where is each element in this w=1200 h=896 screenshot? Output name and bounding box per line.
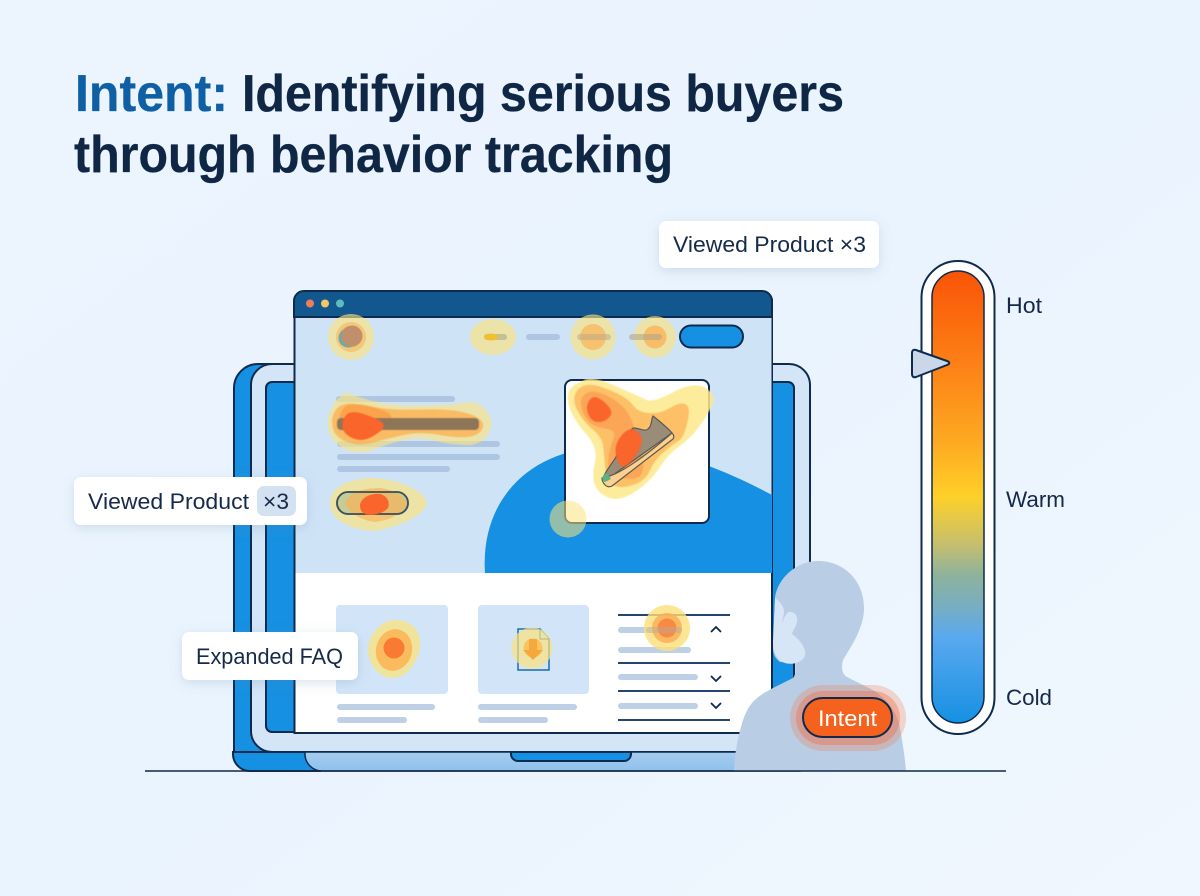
intent badge (790, 685, 906, 751)
intent badge: Intent (818, 706, 877, 731)
nav button (680, 326, 743, 348)
callout: expanded FAQ: Expanded FAQ (196, 644, 343, 669)
title: Intent: (75, 65, 228, 123)
card 2 (478, 605, 589, 694)
callout: viewed product left (74, 477, 307, 525)
thermometer labels: Hot (1006, 293, 1043, 318)
laptop screen frame (251, 364, 810, 752)
title: through behavior tracking (74, 126, 673, 184)
callout: viewed product left: ×3 (263, 489, 289, 514)
laptop base (305, 752, 800, 771)
product card (565, 380, 709, 523)
thermometer labels: Warm (1006, 487, 1065, 512)
laptop (233, 364, 810, 771)
laptop notch (511, 752, 631, 761)
laptop inner screen (266, 382, 794, 732)
nav links (484, 334, 560, 340)
heat: document (512, 628, 552, 668)
thermometer pointer (912, 350, 949, 377)
thermometer labels: Cold (1006, 685, 1052, 710)
hero text lines (336, 396, 500, 472)
heat: card 1 (368, 620, 420, 678)
icon: sneaker (602, 416, 674, 487)
heat: nav logo (328, 314, 374, 360)
heat: FAQ (644, 605, 690, 651)
FAQ accordion (618, 615, 730, 720)
person face highlight (773, 598, 805, 664)
callout: viewed product top: Viewed Product ×3 (673, 232, 866, 257)
thermometer labels (1006, 293, 1065, 710)
page background (294, 300, 772, 733)
laptop back shell (234, 364, 300, 752)
icon: download document (518, 629, 549, 670)
heat: product card (569, 380, 712, 497)
callout: expanded FAQ (182, 632, 358, 680)
hero blue shape (485, 447, 772, 573)
callout: viewed product left: Viewed Product (88, 489, 250, 514)
hero cta (337, 492, 408, 514)
laptop base left (233, 752, 320, 771)
window dots (306, 300, 344, 308)
title (74, 65, 844, 184)
ground line (145, 770, 1006, 772)
thermometer (912, 261, 1065, 734)
browser header (294, 291, 772, 317)
heat: headline (330, 395, 489, 450)
heat: cta (330, 478, 427, 531)
person silhouette (734, 561, 906, 771)
card 1 (336, 605, 448, 694)
heat: nav links (470, 314, 676, 360)
heat: product hot spot (617, 431, 640, 465)
card captions (337, 704, 577, 723)
title: Identifying serious buyers (242, 65, 844, 123)
heatmap overlays (328, 314, 712, 678)
browser window (294, 291, 772, 733)
nav logo (339, 326, 361, 348)
heat: small circle (550, 500, 586, 538)
callout: viewed product top (659, 221, 879, 268)
